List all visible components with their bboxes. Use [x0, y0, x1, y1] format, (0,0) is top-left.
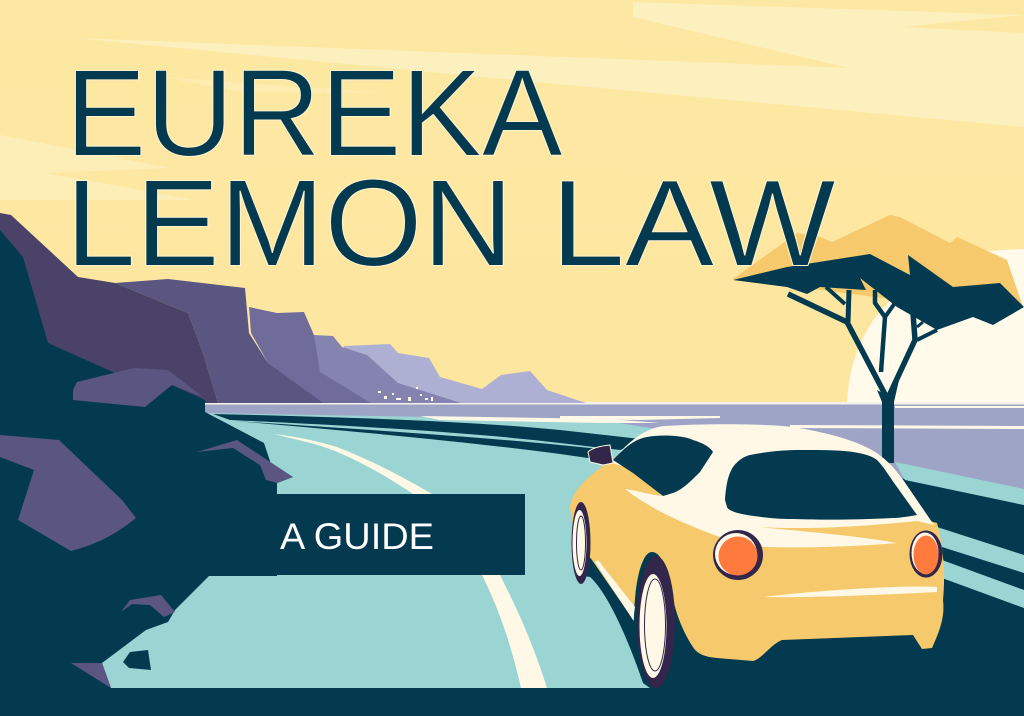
sea — [200, 402, 1024, 523]
side window — [613, 436, 713, 496]
foliage dark — [733, 254, 1024, 330]
rock facet left — [0, 435, 136, 551]
dark road edge bands — [213, 414, 650, 459]
title line 1: EUREKA — [66, 46, 562, 182]
car roof and shoulder — [612, 424, 934, 547]
guide banner — [209, 494, 525, 575]
distant cliffs — [0, 213, 586, 403]
title line 2 word 1: LEMON — [66, 156, 514, 292]
far wheel — [572, 502, 590, 584]
guide banner: A GUIDE — [280, 515, 434, 557]
rock facet right — [197, 440, 293, 483]
foliage light — [733, 215, 1023, 307]
boulder — [73, 368, 203, 407]
road edge teal stripes — [895, 462, 1024, 608]
lower rock facet — [71, 663, 111, 688]
sun — [847, 249, 1024, 403]
pebble — [123, 650, 151, 670]
car shadow — [577, 540, 760, 688]
tree — [733, 215, 1024, 463]
title — [66, 46, 836, 292]
title line 2 word 2: LAW — [550, 156, 836, 292]
branches — [788, 287, 937, 400]
car body — [570, 440, 944, 661]
small rock facet — [121, 595, 175, 617]
right tail light — [910, 530, 942, 578]
foreground rocks — [0, 230, 1024, 716]
lower body highlights — [764, 587, 937, 597]
trunk — [877, 380, 899, 463]
mirror — [588, 445, 613, 465]
town lights — [378, 387, 433, 401]
road centre line — [274, 434, 547, 688]
rear window — [725, 450, 917, 520]
left tail light — [713, 530, 763, 580]
white shoreline streak — [420, 416, 660, 423]
road — [0, 413, 700, 716]
dark road right of car — [690, 478, 1024, 716]
near wheel — [637, 556, 675, 688]
car — [570, 424, 944, 688]
